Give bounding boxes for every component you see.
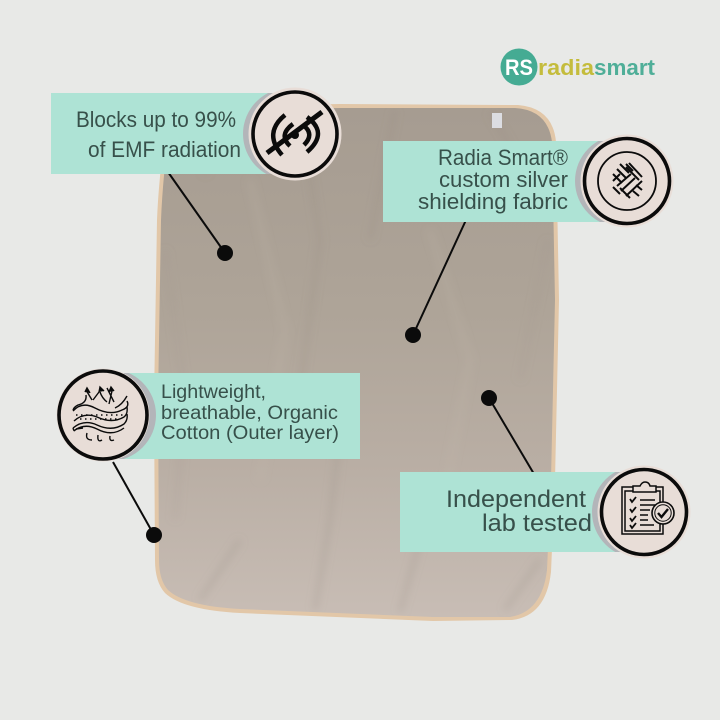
callout text: silver fabric: Radia Smart® [438, 145, 568, 170]
icon: woven fabric [613, 163, 642, 198]
blanket [154, 104, 559, 621]
leader line: silver fabric [405, 220, 466, 343]
callout text: organic cotton [161, 382, 339, 444]
callout text: organic cotton: breathable, Organic [161, 403, 338, 424]
logo: RS [505, 55, 533, 80]
callout: organic cotton [56, 368, 360, 462]
callout text: silver fabric: custom silver [439, 167, 568, 192]
callout text: silver fabric [418, 145, 568, 214]
leader line: organic cotton [113, 462, 162, 543]
callout text: organic cotton: Lightweight, [161, 382, 266, 403]
logo [500, 48, 656, 86]
callout: lab tested [400, 466, 690, 558]
callout: silver fabric [383, 134, 674, 228]
callout text: EMF radiation [76, 107, 241, 162]
callout text: EMF radiation: Blocks up to 99% [76, 107, 236, 132]
logo: smart [594, 55, 656, 80]
icon: no signal [267, 112, 322, 155]
leader line: lab tested [481, 390, 534, 474]
callout text: lab tested: Independent [446, 486, 586, 513]
callout: EMF radiation [51, 88, 342, 180]
callout text: EMF radiation: of EMF radiation [88, 137, 241, 162]
icon: breathable layers [73, 387, 128, 441]
callout text: organic cotton: Cotton (Outer layer) [161, 423, 339, 444]
callout text: silver fabric: shielding fabric [418, 189, 568, 214]
callout text: lab tested: lab tested [482, 510, 592, 537]
logo: radia [538, 55, 595, 80]
icon: care label [492, 113, 502, 128]
icon: clipboard checklist [622, 482, 674, 534]
callout text: lab tested [446, 486, 592, 537]
leader line: EMF blocking [168, 172, 233, 261]
